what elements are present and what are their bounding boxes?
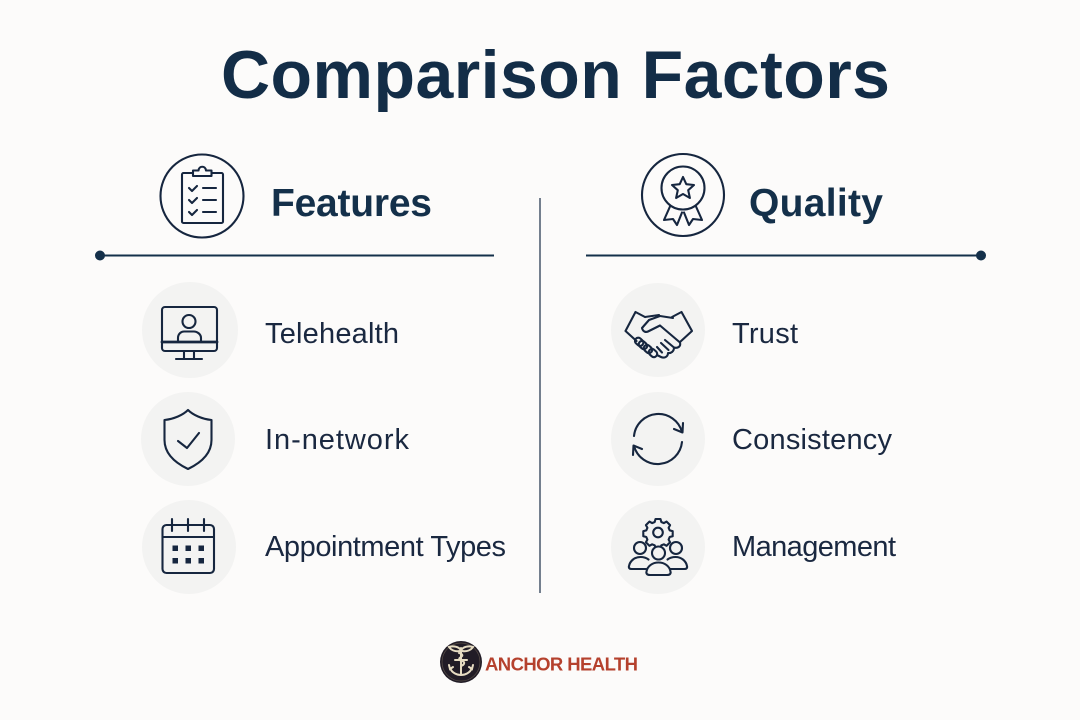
- icon: calendar: [142, 500, 236, 594]
- label: appointment types: Appointment Types: [265, 531, 506, 563]
- icon: shield with check: [141, 392, 235, 486]
- item: consistency: [611, 392, 892, 486]
- icon: clipboard checklist: [160, 154, 244, 238]
- header rule: [95, 250, 494, 260]
- title: Comparison Factors: [221, 37, 890, 113]
- label: consistency: Consistency: [732, 424, 892, 456]
- label: telehealth: Telehealth: [265, 318, 399, 350]
- item: management: [611, 500, 896, 594]
- item: appointment types: [142, 500, 506, 594]
- header rule: [586, 250, 986, 260]
- logo: anchor health: [440, 641, 638, 683]
- item: in-network: [141, 392, 410, 486]
- heading: quality: Quality: [749, 182, 883, 225]
- icon: sync arrows: [611, 392, 705, 486]
- label: in-network: In-network: [265, 424, 410, 456]
- icon: anchor emblem: [440, 641, 482, 683]
- brand name: ANCHOR HEALTH: [485, 654, 638, 674]
- icon: monitor with person: [142, 282, 238, 378]
- icon: award medal: [642, 154, 724, 236]
- icon: team with gear: [611, 500, 705, 594]
- panel: features: [95, 154, 506, 594]
- heading: features: Features: [271, 182, 432, 225]
- icon: handshake: [611, 283, 705, 377]
- label: trust: Trust: [732, 318, 798, 350]
- label: management: Management: [732, 531, 896, 563]
- item: telehealth: [142, 282, 399, 378]
- panel: quality: [586, 154, 986, 594]
- item: trust: [611, 283, 798, 377]
